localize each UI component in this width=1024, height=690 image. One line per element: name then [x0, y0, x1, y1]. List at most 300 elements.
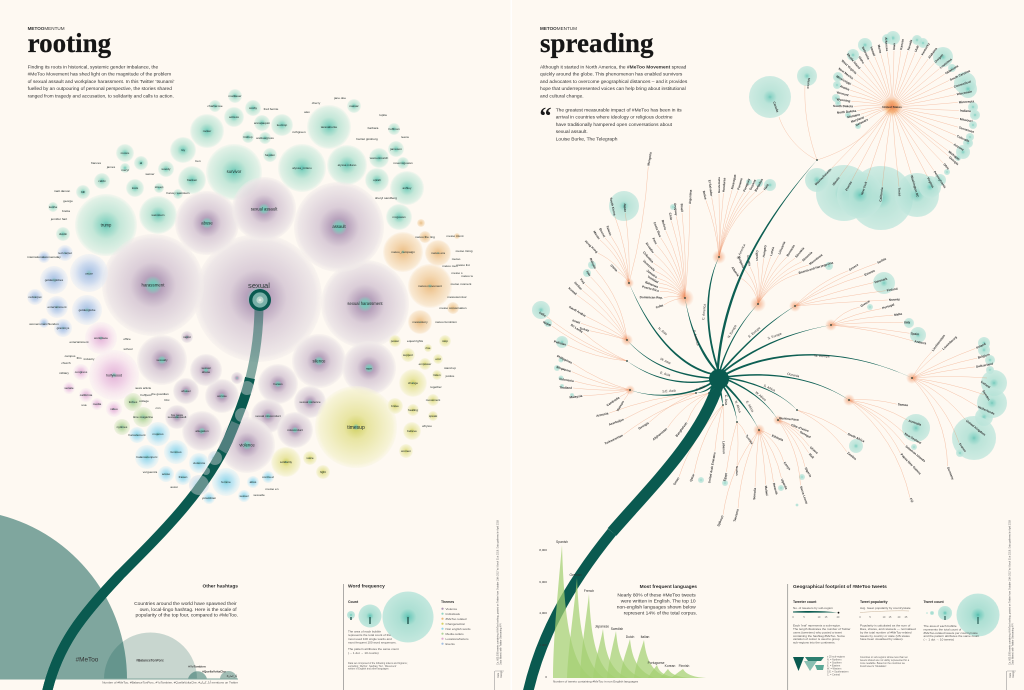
axis caption: Number of tweets containing #MeToo in non English languages: [553, 680, 639, 684]
axis labels: 8,000: [539, 548, 547, 552]
intro text: spreading: quickly around the globe. This phenomenon has enabled survivors: [540, 72, 683, 78]
fan: W. Asia: Pakistan: [553, 339, 567, 347]
theme: media outlets bubbles: time magazine: [133, 415, 153, 419]
theme: non-english words bubbles: yotambien: [202, 496, 216, 500]
theme: events bubbles: redcarpet: [28, 295, 42, 299]
fan: United States: Louisiana: [939, 57, 953, 70]
fan: C. Asia: [670, 402, 726, 486]
theme: individuals bubbles: jane doe: [333, 96, 346, 100]
fan: Oceania: Papua New Guinea: [900, 453, 922, 476]
credits: spreading page: Ca. 600,000 tweets containing #MeToo hashtag, posted on Twitter from October 15th 2017 to March 31st 2018. Data gathered in April 2018: [1009, 519, 1012, 665]
fan: United States: Oklahoma: [944, 64, 959, 75]
theme: individuals bubbles: dustin: [59, 232, 67, 236]
theme: me-too related bubbles: metoo_campaign: [391, 250, 415, 254]
fan: S. Europe: [825, 298, 927, 346]
fan: N. Europe: Macedonia: [808, 253, 824, 266]
credits: spreading page: Data: [1009, 672, 1012, 678]
theme: me-too related bubbles: metoo the ring: [415, 235, 435, 239]
theme: individuals bubbles: ashley: [403, 186, 412, 190]
fan: United States: Alaska: [839, 84, 850, 92]
theme: individuals bubbles: sheryl sandberg: [375, 196, 397, 200]
fan: W. Europe: Luxembourg: [941, 335, 958, 351]
fan: E. Europe: Finland: [886, 287, 898, 292]
fan: N. Asia: China: [609, 263, 619, 273]
theme: change / action bubbles: women: [401, 449, 411, 453]
theme: violence bubbles: violence: [239, 442, 255, 448]
intro text: spreading: and cultural change.: [540, 93, 584, 99]
theme: violence bubbles: sexual: [202, 366, 211, 370]
hashtag chart: semicircles: #BalanceTonPorc: [136, 658, 164, 662]
theme: violence bubbles: abuser: [181, 389, 191, 393]
fan: C. America: Haiti: [763, 183, 770, 191]
theme: media outlets bubbles: nytimes: [117, 425, 128, 429]
theme: locations and factors bubbles: workplace: [94, 336, 108, 340]
theme: locations and factors bubbles: office: [123, 337, 131, 341]
fan: United States: Hawaii: [869, 46, 876, 57]
theme: individuals bubbles: oprah: [373, 178, 381, 182]
legend: sub-region shapes: E. = Eastern: [827, 664, 841, 668]
legend: data note: Data set composed of the following tokens and bigrams;: [348, 662, 408, 665]
title: rooting: rooting: [28, 28, 112, 58]
legend: tweet popularity: likes, shares, and retweets — normalised: [860, 627, 916, 631]
fan: E. Europe: Greece: [848, 263, 859, 272]
legend: sub-region shapes: C. = Central: [827, 674, 840, 676]
branch labels: S. Africa: [763, 384, 776, 393]
theme: individuals bubbles: alyssa milano: [338, 163, 357, 167]
theme: individuals bubbles: cherry: [312, 101, 321, 105]
theme: individuals bubbles: annapaquin: [254, 121, 270, 125]
fan: United States: Virginia: [926, 176, 935, 189]
semicircle: #BalanceTonPorc: [104, 633, 197, 679]
fan: S.E. Asia: Singapore: [556, 365, 572, 373]
branch labels: N. America: [736, 243, 746, 260]
fan: E. Africa: Djibouti: [716, 515, 725, 527]
theme: me-too related bubbles: [383, 219, 474, 334]
theme: me-too related bubbles: metoo men: [442, 264, 458, 268]
theme: non-english words bubbles: harcelement: [128, 433, 146, 437]
fan: S. America: Bahamas: [645, 280, 659, 289]
branch labels: N. Europe: [727, 324, 738, 339]
theme: violence bubbles: rape: [366, 366, 372, 370]
fan: C. Asia: Qatar: [689, 473, 696, 482]
fan: N. Europe: Latvia: [769, 246, 775, 256]
legend: tweeter count: sub-regions into the continents.: [793, 641, 835, 645]
legend: sub-region shapes: ≥ 20 sub-regions: [827, 656, 846, 658]
legend: sub-region shapes: S.E. = Southeastern: [827, 670, 849, 674]
fan: S. America: Colombia: [642, 251, 655, 264]
legend: tweet popularity: Tweet popularity: [860, 600, 888, 604]
theme: non-english words bubbles: mujeres: [152, 432, 164, 436]
fan: United States: West Virginia: [841, 59, 858, 75]
fan: United States: Wyoming: [836, 97, 851, 103]
fan: N. Asia: Brunei: [598, 227, 606, 238]
theme: media outlets bubbles: cnn: [156, 406, 161, 410]
theme: individuals bubbles: moore: [121, 151, 130, 155]
fan: United States: Kansas: [899, 38, 905, 50]
theme: me-too related bubbles: metoo feminism: [435, 320, 457, 324]
fan: W. Asia: Sri Lanka: [570, 323, 584, 334]
fan: S. Asia: Afghanistan: [652, 427, 668, 441]
theme: media outlets bubbles: huffpost: [141, 393, 152, 397]
theme: individuals bubbles: jennifer hart: [50, 217, 67, 221]
legend: tweeter count: 5: [803, 616, 805, 619]
stem tip ring: [249, 289, 271, 311]
fan: United States: Nebraska: [861, 46, 871, 60]
fan: E. Europe: Denmark: [874, 277, 888, 284]
fan: United States: California: [878, 187, 884, 202]
theme: events bubbles: entertainment: [48, 305, 67, 309]
theme: non-english words bubbles: sexuelle: [253, 493, 265, 497]
page fold between spreads: [510, 0, 512, 690]
theme: individuals bubbles: woody: [162, 167, 171, 171]
fan: N. Europe: Hungary: [762, 244, 767, 258]
fan: E. Asia: Jordan: [573, 280, 583, 291]
quote: Louise Burke: The greatest measurable impact of #MeToo has been in its: [556, 108, 682, 114]
branch labels: S. America: [692, 330, 700, 346]
theme: change / action bubbles: brave: [391, 404, 399, 408]
theme: locations and factors bubbles: media: [93, 402, 101, 406]
text: most frequent languages: Nearly 80% of these #MeToo tweets: [617, 592, 696, 598]
theme: violence bubbles: sexualassault: [168, 415, 187, 419]
language areas: [553, 545, 706, 678]
fan: United States: Maine: [877, 44, 883, 54]
fan: S. America: Chile: [668, 212, 673, 221]
theme: violence bubbles: accuse: [217, 394, 227, 398]
intro text: spreading: hope that underrepresented voices can help bring about institutional: [540, 86, 686, 92]
legend: tweet popularity: 5: [869, 616, 871, 619]
fan: United States: Oregon: [934, 53, 944, 64]
fan: United States: Washington DC: [910, 175, 920, 199]
branch labels: E. Asia: [660, 371, 671, 377]
text: most frequent languages: non-english languages shown below: [617, 604, 696, 610]
fan: United States: Tennessee: [958, 126, 975, 134]
branch labels: S.E. Asia: [662, 389, 676, 393]
legend: data note: more readable. Based on the countries we: [860, 662, 906, 665]
fan: S. Europe: Portugal: [882, 302, 895, 310]
fan: W. Europe: Sweden: [981, 389, 991, 401]
intro text: spreading: Although it started in North America, the #MeToo Movement spread: [540, 66, 686, 70]
theme: violence bubbles: sexual harassment: [347, 301, 383, 306]
heading: geographical footprint: Geographical footprint of #MeToo tweets: [793, 584, 887, 590]
heading: most frequent languages: Most frequent languages: [640, 584, 697, 590]
fan: E. Africa: Malawi: [764, 485, 769, 496]
theme: individuals bubbles: bill: [81, 190, 85, 194]
theme: locations and factors bubbles: campus: [65, 354, 76, 358]
legend: tweeter count: users (tweeters) who posted a tweet: [793, 630, 842, 634]
fan: C. America: Honduras: [722, 177, 727, 192]
fan: N. Africa: [722, 421, 754, 482]
legend: themes: Change/action: [446, 622, 465, 626]
theme: media outlets bubbles: fox news: [171, 413, 184, 417]
legend: data note: Countries or sub-regions whose less than ten: [860, 656, 909, 659]
fan: E. Asia: Iran: [585, 270, 592, 277]
fan: C. Asia: United Arab Emirates: [707, 452, 717, 484]
theme: locations and factors bubbles: usa: [82, 403, 87, 407]
fan: C. America: Paraguay: [742, 178, 751, 192]
fan: C. America: Guyana: [748, 179, 757, 191]
legend: tweet popularity: Popularity is calculated as the sum of: [860, 624, 910, 628]
theme: violence bubbles: misconduct: [287, 428, 303, 432]
legend: tweeter count: 0: [792, 616, 794, 619]
credits: spreading page: Data filtered with Twitter Streaming API: [1012, 623, 1015, 665]
legend: count bubbles: Count: [348, 600, 359, 604]
fan: United States: Mississippi: [835, 74, 852, 86]
legend: bubble notes: The pattern attributes the same count: [348, 647, 399, 651]
hashtag chart: semicircles: #QuellaVoltaChe: [202, 670, 226, 674]
credits: rooting page: Design: [500, 670, 503, 678]
intro text: rooting: Finding its roots in historical, systemic gender imbalance, the: [28, 64, 158, 70]
fan: E. Africa: Rwanda: [772, 482, 779, 495]
theme: individuals bubbles: rosemcgowan: [393, 161, 413, 165]
fan: United States: Wisconsin: [956, 89, 972, 96]
text: other hashtags: popularity of the top four, compared to #MeToo.: [136, 613, 238, 619]
theme: individuals bubbles: franken: [187, 178, 197, 182]
branch labels: S. Europe: [767, 332, 782, 340]
theme: events bubbles: [27, 245, 108, 337]
fan: United States: South Dakota: [833, 104, 853, 108]
theme: change / action bubbles: healing: [408, 408, 418, 412]
quote: Louise Burke: have traditionally hampered open conversations about: [556, 122, 673, 128]
fan: S. Asia: Bangladesh: [675, 421, 688, 438]
theme: me-too related bubbles: metoo conversation: [440, 306, 467, 310]
theme: media outlets bubbles: [114, 386, 184, 435]
language labels: Italian: [641, 635, 650, 639]
credits: rooting page: [494, 519, 504, 690]
theme: locations and factors bubbles: video: [110, 407, 118, 411]
legend: themes: Events: [446, 642, 455, 646]
language labels: Korean: [665, 664, 675, 668]
theme: individuals bubbles: meryl: [121, 168, 129, 172]
theme: non-english words bubbles: frauen: [179, 475, 188, 479]
title: spreading: spreading: [540, 28, 654, 58]
theme: individuals bubbles: fred bernie: [264, 107, 279, 111]
theme: change / action bubbles: equal rights: [407, 339, 423, 343]
fan: E. Asia: Turkey: [579, 326, 590, 333]
legend: tweeter count: The length illustrates the number of Twitter: [793, 627, 851, 631]
theme: me-too related bubbles: metoostory: [412, 320, 428, 324]
theme: media outlets bubbles: bbc: [164, 398, 170, 402]
fan: S. America: Dominican Rep.: [640, 295, 663, 300]
legend: tweeter count: Each ‘leaf’ represents a sub-region.: [793, 624, 841, 628]
fan: N. Asia: Hong Kong: [584, 239, 599, 254]
fan: United States: Montana: [847, 112, 861, 119]
plant stem: rooting: [47, 305, 259, 690]
fan: United States: Minnesota: [959, 99, 975, 104]
theme: non-english words bubbles: balancetonporc: [136, 455, 158, 459]
semicircle: #MeToo: [0, 515, 127, 679]
fan: S. America: Cuba: [655, 303, 664, 309]
theme: locations and factors bubbles: church: [61, 361, 71, 365]
credits: rooting page: Ca. 600,000 tweets containing #MeToo hashtag, posted on Twitter from October 15th 2017 to March 31st 2018. Data gathered in April 2018: [497, 519, 500, 665]
fan: United States: Alabama: [927, 47, 938, 59]
fan: W. Europe: Liechtenstein: [931, 334, 946, 352]
legend: bubble notes: most used 100 single words and: [348, 637, 392, 641]
stem over hashtag chart: [47, 575, 120, 690]
theme: change / action bubbles: together: [430, 385, 442, 389]
fan: North America head: Canada: [772, 101, 780, 113]
fan: E. Asia: Saudi Arabia: [568, 305, 587, 318]
fan: United States: Nevada: [906, 39, 913, 51]
fan: United States: Arkansas: [884, 37, 889, 52]
theme: individuals bubbles: leena: [401, 135, 409, 139]
fan: United States: United States: [882, 105, 902, 109]
fan: S. America: Brazil: [680, 204, 684, 212]
hashtag chart: semicircles: #YoTambien: [188, 664, 206, 668]
fan: N. Europe: Slovakia: [794, 246, 805, 259]
fan: N. Europe: Albania: [730, 266, 740, 278]
language labels: Spanish: [556, 540, 568, 544]
credits: spreading page: Design: [1012, 670, 1015, 678]
fan: W. Africa: Sierra Leone: [799, 486, 809, 505]
fan: C. America: Barbados: [754, 178, 764, 192]
theme: change / action bubbles: [271, 335, 456, 479]
branch labels: N. Asia: [657, 326, 668, 336]
panel: word frequency legend: [347, 584, 471, 671]
fan: W. Africa: Côte d'Ivoire: [790, 423, 810, 433]
theme: individuals bubbles: alex: [304, 110, 310, 114]
legend: themes: Violence: [446, 607, 457, 611]
legend: tweet popularity: 15: [889, 616, 892, 619]
fan: W. Africa: Burkina Faso: [779, 416, 799, 422]
fan: S. America: Bolivia: [661, 219, 667, 231]
area chart: most frequent languages: [528, 532, 706, 690]
theme: individuals bubbles: roy: [181, 148, 186, 152]
theme: change / action bubbles: whytoo: [422, 424, 432, 428]
fan: N. Africa: Tunisia: [745, 434, 754, 445]
fan: S. Asia west: Azerbaijan: [608, 417, 624, 427]
theme: individuals bubbles: mattlauer: [229, 94, 241, 98]
theme: individuals bubbles: [48, 89, 424, 256]
fan: United States: New Mexico: [838, 67, 854, 80]
fan: North America head: Mexico: [806, 78, 811, 89]
theme: change / action bubbles: justice: [445, 374, 455, 378]
fan: E. Europe: Norway: [889, 297, 900, 302]
fan: United States: Colorado: [956, 134, 970, 143]
theme: locations and factors bubbles: [59, 322, 149, 417]
fan: E. Africa: Kenya: [783, 461, 792, 471]
fan: W. Europe: [906, 334, 996, 480]
legend: bubble notes: The area of each bubble: [348, 630, 381, 634]
branch labels: E. Africa: [745, 400, 755, 413]
branch labels: Oceania: [787, 372, 800, 378]
theme: violence bubbles: harassment: [142, 282, 165, 288]
theme: events bubbles: goldenglobe: [79, 308, 96, 312]
intro text: rooting: fuelled by an outpouring of personal perspective, the stories shared: [28, 86, 172, 92]
fan: United States: Illinois: [832, 176, 841, 186]
theme: media outlets bubbles: forbes: [129, 400, 138, 404]
theme: violence bubbles: abuse: [201, 220, 213, 226]
theme: individuals bubbles: charlierose: [207, 104, 223, 108]
fan: N. Europe: Croatia: [746, 255, 752, 267]
theme: violence bubbles: sexually: [156, 358, 168, 362]
fan: United States: Georgia: [948, 155, 960, 166]
credits: rooting page: Data filtered with Twitter Streaming API: [500, 623, 503, 665]
theme: individuals bubbles: streep: [155, 185, 164, 189]
theme: individuals bubbles: louis: [132, 186, 139, 190]
fan: North America head: [772, 78, 892, 161]
fan: S. America: Argentina: [688, 189, 693, 204]
fan: W. Europe: Switzerland: [976, 362, 993, 369]
text: other hashtags: Countries around the world have spawned their: [134, 601, 237, 607]
credits: rooting page: Data: [497, 672, 500, 678]
legend: tweeter count: containing the hashtag #MeToo. Some: [793, 634, 845, 638]
fan: S. America: Jamaica: [646, 269, 658, 279]
theme: locations and factors bubbles: college: [139, 399, 149, 403]
kicker: rooting page: METOOMENTUM: [28, 26, 65, 31]
text: most frequent languages: were written in English. The top 10: [621, 598, 696, 604]
legend: tweet popularity: have been visualised by states).: [860, 637, 904, 641]
fan: S. America: Trinidad: [647, 275, 659, 284]
fan: C. America: Guatemala: [717, 177, 721, 193]
theme: non-english words bubbles: acoso: [162, 472, 170, 476]
language labels: Dutch: [626, 635, 634, 639]
theme: violence bubbles: rapist: [183, 335, 191, 339]
legend: tweeter count: [792, 600, 851, 645]
text: most frequent languages: represent 14% of the total corpus.: [624, 610, 697, 616]
intro text: rooting: #MeToo Movement has shed light on the magnitude of the problem: [28, 72, 171, 78]
fan: W. Africa: Senegal: [799, 430, 812, 439]
branch labels: [657, 243, 830, 413]
fan: United States: Vermont: [836, 90, 849, 97]
theme: violence bubbles: sexual violence: [299, 400, 321, 404]
fan: S. America: Venezuela: [642, 259, 656, 272]
theme: locations and factors bubbles: school: [124, 347, 133, 351]
fan: United States: [814, 37, 975, 202]
divider: geographical legend: [787, 584, 789, 690]
fan: United States: North Dakota: [837, 109, 857, 115]
language labels: Portuguese: [648, 661, 665, 665]
fan: N. Africa: Egypt: [722, 472, 728, 482]
theme: individuals bubbles: bretta: [62, 209, 70, 213]
fan: W. Europe: Iceland: [980, 380, 991, 389]
legend: tweet count: [924, 594, 1000, 642]
theme: individuals bubbles: nassar: [349, 104, 359, 108]
fan: S. Africa: [796, 407, 866, 461]
theme: me-too related bubbles: metoo rising: [456, 249, 473, 253]
theme: events bubbles: internationalwomensday: [27, 255, 61, 259]
icon: quotation mark: “: [540, 104, 552, 130]
theme: non-english words bubbles: verguenza: [143, 470, 158, 474]
theme: individuals bubbles: trump: [101, 222, 112, 228]
theme: individuals bubbles: george: [63, 199, 73, 203]
legend: bubble notes: (→ 1 dot → 10 counts): [348, 651, 379, 655]
theme: individuals bubbles: hayden: [265, 153, 275, 157]
branch labels: C. America: [701, 304, 707, 320]
fan: E. Europe: [789, 255, 900, 312]
theme: individuals bubbles: al: [140, 161, 143, 165]
legend: tweet popularity: 25: [905, 616, 908, 619]
heading: other hashtags: Other hashtags: [202, 584, 238, 590]
fan: W. Europe: United Kingdom: [965, 419, 987, 437]
fan: S. Asia west: [596, 390, 697, 431]
fan: W. Africa: Mali: [808, 452, 815, 460]
fan: S. Asia: [602, 389, 711, 446]
theme: violence bubbles: abuse: [202, 370, 210, 374]
fan: S. America: Costa Rica: [652, 221, 662, 238]
branch labels: W. Africa: [754, 391, 767, 402]
fan: W. Asia: [537, 311, 628, 365]
theme: individuals bubbles: james: [106, 165, 116, 169]
theme: violence bubbles: assault: [332, 224, 346, 229]
legend: tweeter count: 10: [818, 616, 821, 619]
text: other hashtags: own, local-lingo hashtag. Here is the scale of: [140, 607, 237, 613]
theme: violence bubbles: [102, 177, 409, 473]
fan: United States: New York: [860, 181, 868, 195]
theme: events bubbles: oscar: [85, 272, 93, 276]
branch labels: N. Africa: [734, 400, 742, 413]
theme: individuals bubbles: frances: [91, 161, 102, 165]
heading: word frequency: Word frequency: [348, 584, 385, 590]
